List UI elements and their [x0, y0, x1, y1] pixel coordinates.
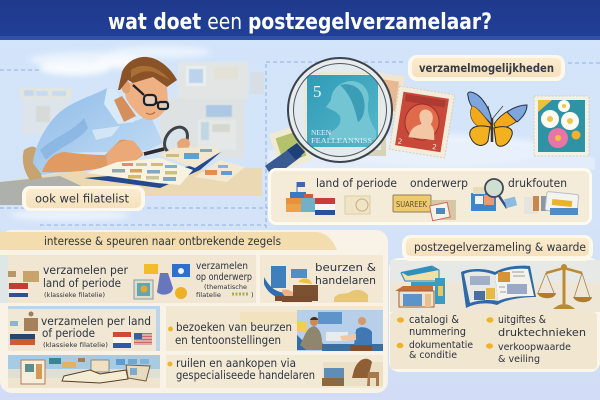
icon: butterfly	[468, 92, 527, 146]
icon: red stamp	[389, 86, 455, 158]
text: dokumentatie en conditie: dokumentatie	[409, 340, 473, 351]
icon: open album	[461, 266, 536, 308]
topic: verzamelen per land	[8, 306, 160, 351]
icon: scales	[537, 264, 592, 309]
icon: parcels	[10, 312, 38, 345]
icon: album and magnifier	[471, 179, 517, 211]
row 1: three topics: (klassieke filatelie)	[44, 291, 105, 299]
text: verzamelen per land of periode: land of periode	[43, 276, 121, 290]
text: verkoopwaarde en veiling: verkoopwaarde	[498, 342, 571, 353]
text: beurzen & handelaren: beurzen &	[315, 261, 376, 274]
icon: shop with books	[395, 266, 445, 307]
icon: magnifying glass with teal stamp: NEEN	[311, 128, 332, 137]
icon: magnifying glass with teal stamp: 5	[313, 82, 322, 101]
text: verzamelen op onderwerp: op onderwerp	[196, 272, 252, 283]
panel: filatelist illustration	[0, 57, 264, 211]
label: ook wel filatelist	[22, 186, 145, 211]
icon: handshake at desk	[264, 266, 318, 302]
text: ruilen en aankopen via gespecialiseede handelaren: gespecialiseede handelaren	[176, 368, 315, 382]
album stamps	[112, 149, 232, 181]
topic: album illustration	[8, 355, 160, 388]
text: ruilen en aankopen via gespecialiseede handelaren: ruilen en aankopen via	[176, 356, 296, 370]
forearm	[42, 140, 143, 172]
icon: red stamp: 2	[432, 143, 437, 152]
label: ook wel filatelist: ook wel filatelist	[35, 192, 129, 206]
icon: stamps SUAREEK: SUAREEK	[396, 200, 428, 209]
panel: verzamelmogelijkheden	[265, 55, 595, 225]
panel: collection types	[268, 168, 592, 225]
text: catalogi en nummering: catalogi &	[409, 314, 459, 326]
text: land of periode: land of periode	[316, 176, 397, 190]
table	[0, 168, 262, 204]
chair	[23, 147, 42, 180]
title: wat doet een postzegelverzamelaar?	[108, 10, 492, 35]
panel: postzegelverzameling en waarde	[389, 235, 600, 372]
row 1: three topics: filatelie	[196, 291, 221, 299]
dashed section outlines	[0, 62, 600, 242]
collar	[104, 88, 134, 124]
icon: misprint stamps	[524, 191, 579, 215]
icon: visitors at exhibition	[297, 310, 383, 351]
text: verzamelen per land of periode: of periode	[42, 326, 95, 340]
icon: red stamp: 2	[397, 137, 403, 146]
face	[124, 77, 168, 120]
text: onderwerp: onderwerp	[410, 176, 468, 190]
text: drukfouten: drukfouten	[508, 176, 567, 190]
icon: dutch and US flags	[113, 332, 152, 348]
shirt folds	[40, 118, 88, 160]
icon: magnifying glass with teal stamp	[265, 58, 392, 178]
icon: background stamps	[269, 72, 405, 170]
icon: postmark stamp	[345, 196, 370, 214]
hair	[118, 57, 177, 90]
glasses	[133, 85, 168, 109]
bullet	[168, 326, 173, 332]
label: postzegelverzameling en waarde	[402, 235, 593, 261]
bullet	[168, 362, 172, 366]
icon: themed stamps	[134, 264, 190, 299]
shirt	[33, 88, 163, 175]
icon: gold coins	[334, 290, 368, 302]
row 1: three topics	[0, 255, 256, 303]
label: postzegelverzameling en waarde: postzegelverzameling & waarde	[414, 240, 586, 254]
text: dokumentatie en conditie: & conditie	[409, 350, 457, 361]
text: verkoopwaarde en veiling: & veiling	[498, 354, 540, 365]
text: uitgiftes en druktechnieken: uitgiftes &	[498, 314, 546, 326]
topic: ruilen en aankopen	[166, 355, 383, 388]
panel: interesse en speuren	[0, 230, 388, 393]
text: verzamelen per land of periode: verzamelen per	[43, 263, 128, 277]
text: verzamelen per land of periode: verzamelen per land	[41, 314, 151, 328]
neck	[114, 96, 136, 122]
heading band: interesse & speuren naar ontbrekende zegels	[44, 234, 281, 248]
label: verzamelmogelijkheden	[408, 55, 565, 81]
text: uitgiftes en druktechnieken: druktechnieken	[498, 327, 586, 339]
icon: flag and post office	[286, 182, 335, 215]
topic: beurzen en handelaren	[260, 255, 383, 303]
header banner	[0, 0, 600, 40]
icon: magnifying glass with teal stamp: FEALLEANNISS	[311, 136, 372, 145]
row 1: three topics: )	[251, 291, 254, 299]
background buildings	[20, 62, 264, 158]
text: verzamelen op onderwerp: verzamelen	[196, 261, 248, 272]
icon: flag and parcels	[8, 271, 39, 297]
text: catalogi en nummering: nummering	[409, 326, 466, 338]
label: verzamelmogelijkheden: verzamelmogelijkheden	[419, 61, 554, 75]
topic: beurzen bezoeken	[166, 306, 383, 351]
magnifier	[160, 123, 192, 157]
text: beurzen & handelaren: handelaren	[315, 274, 376, 287]
icon: dealer stall	[322, 359, 383, 386]
row 1: three topics: (thematische	[204, 283, 247, 291]
icon: flower stamp	[534, 96, 589, 156]
icon: albums	[21, 358, 150, 384]
sky highlight	[268, 141, 595, 170]
topic: verzamelen per land: (klassieke filatelie)	[43, 341, 108, 349]
text: bezoeken van beurzen en tentoonstellingen: en tentoonstellingen	[175, 333, 281, 347]
icon: stamps SUAREEK	[393, 195, 456, 221]
bullets	[396, 317, 494, 349]
icon: open stamp album	[84, 147, 245, 188]
text: bezoeken van beurzen en tentoonstellingen: bezoeken van beurzen	[176, 320, 292, 334]
icon: man with magnifier	[33, 57, 192, 175]
heading band	[0, 232, 337, 250]
